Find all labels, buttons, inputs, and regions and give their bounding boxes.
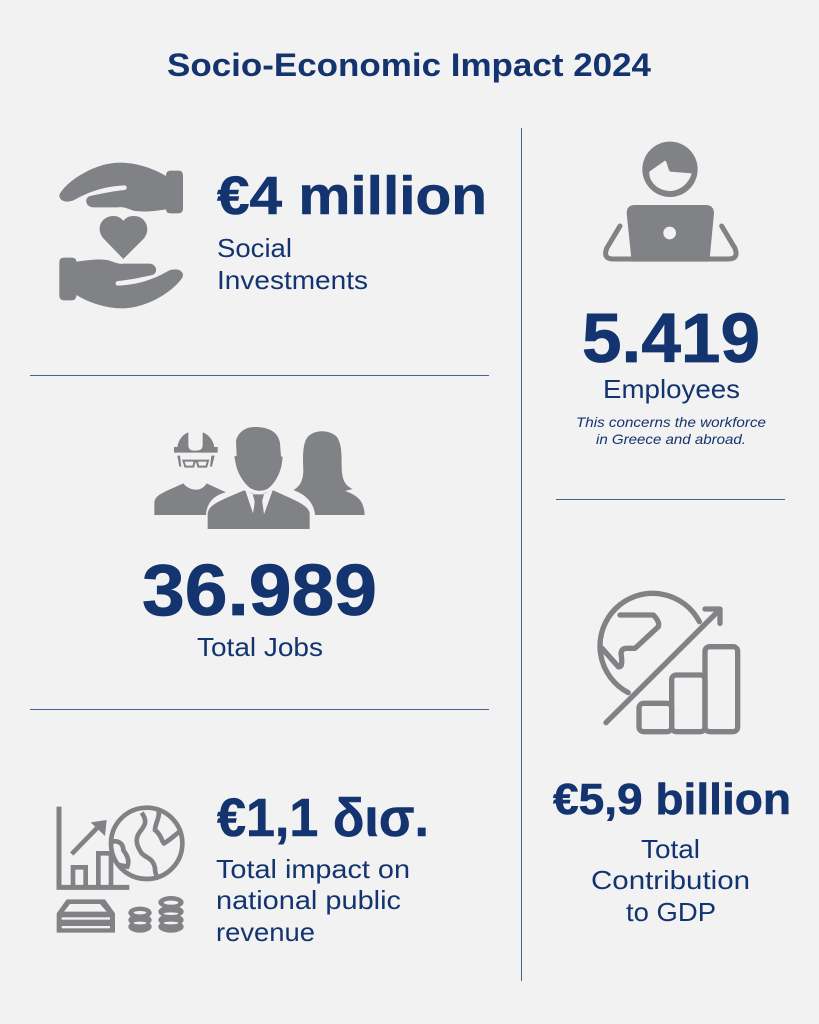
label: public revenue <box>216 854 410 947</box>
panel: contribution to GDP <box>553 593 791 927</box>
title: Socio-Economic Impact 2024 <box>167 47 651 83</box>
value: 5,9 billion: €5,9 billion <box>553 775 791 824</box>
label: contribution to GDP: Contribution <box>591 865 750 895</box>
icon: globe with rising bars <box>600 593 738 732</box>
label: total jobs: Total Jobs <box>197 632 323 662</box>
panel: employees <box>576 142 766 447</box>
panel: social investments <box>59 163 487 308</box>
note: workforce: in Greece and abroad. <box>596 431 746 447</box>
label: public revenue: revenue <box>216 917 315 947</box>
value: 1,1 bn: €1,1 δισ. <box>217 788 429 848</box>
label: social investments: Social <box>217 233 292 263</box>
panel: total jobs <box>142 427 377 662</box>
label: contribution to GDP: Total <box>641 834 700 864</box>
label: social investments: Investments <box>217 265 368 295</box>
icon: chart, globe and coins <box>57 807 184 933</box>
panel: public revenue <box>57 788 429 947</box>
note: workforce <box>576 414 766 447</box>
label: public revenue: Total impact on <box>216 854 410 884</box>
label: public revenue: national public <box>216 885 401 915</box>
icon: three people <box>154 427 365 529</box>
label: contribution to GDP: to GDP <box>626 897 716 927</box>
icon: hands and heart <box>59 163 183 308</box>
label: contribution to GDP <box>591 834 750 927</box>
value: 4 million: €4 million <box>217 166 487 226</box>
value: 36.989: 36.989 <box>142 551 377 631</box>
note: workforce: This concerns the workforce <box>576 414 766 430</box>
value: 5.419: 5.419 <box>582 299 760 377</box>
icon: person with laptop <box>606 142 736 262</box>
label: employees: Employees <box>603 374 740 404</box>
label: social investments <box>217 233 368 295</box>
